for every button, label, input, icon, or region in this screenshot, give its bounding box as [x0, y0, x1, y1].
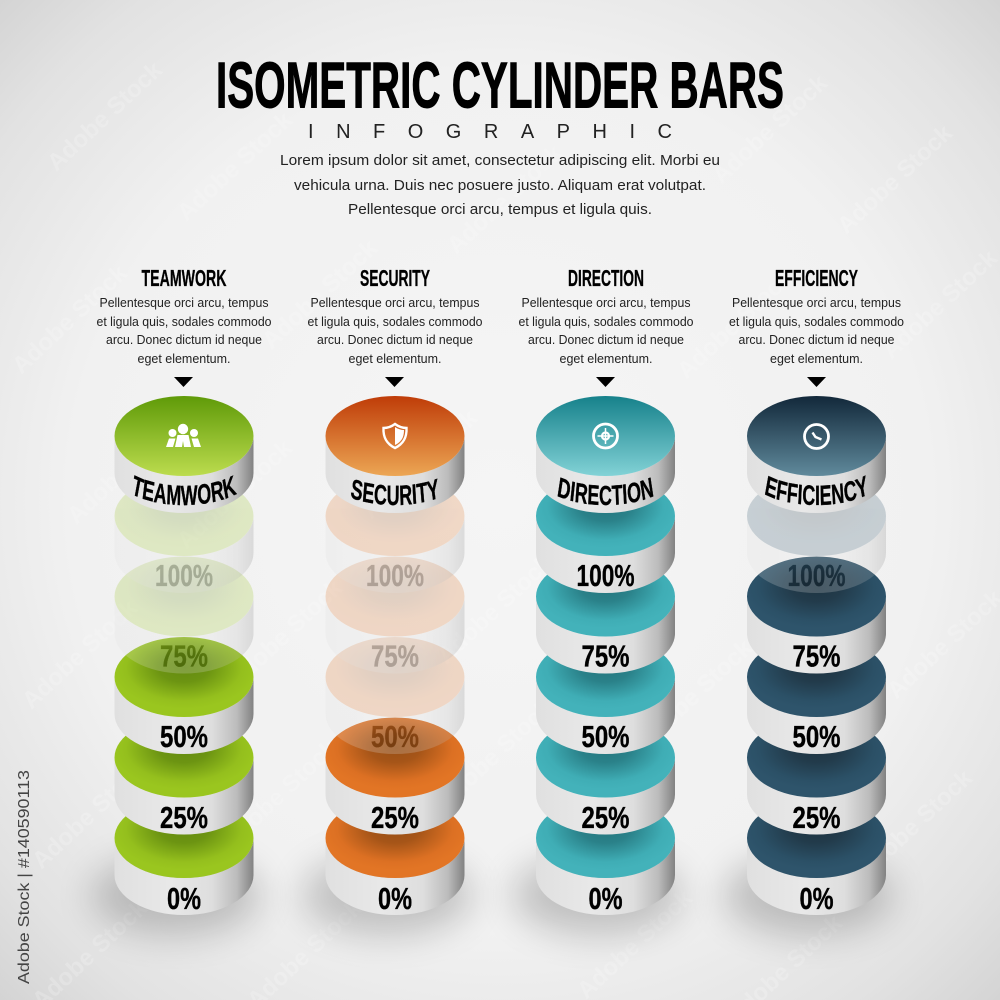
tier 50% (faded): 50% — [371, 719, 419, 754]
tier 75%: 75% — [792, 638, 840, 674]
tier 0% — [114, 798, 254, 916]
column heading: teamwork — [96, 265, 272, 366]
tier 75% (faded) — [326, 556, 464, 674]
tier 100% (faded) — [326, 476, 464, 593]
column heading: teamwork: arcu. Donec dictum id neque — [106, 333, 262, 347]
icon: team — [166, 424, 201, 447]
column heading: efficiency: et ligula quis, sodales commodo — [729, 315, 904, 329]
intro text: vehicula urna. Duis nec posuere justo. Aliquam erat volutpat. — [294, 177, 706, 194]
tier 100% — [536, 476, 675, 593]
tier 25%: 25% — [792, 800, 840, 835]
column heading: direction: Pellentesque orci arcu, tempus — [522, 296, 690, 310]
cylinder column: efficiency — [713, 396, 904, 951]
watermark pattern: Adobe Stock — [432, 549, 558, 669]
tier 100% (faded): 100% — [788, 558, 846, 593]
top cap: direction — [536, 396, 675, 513]
intro text — [280, 152, 720, 218]
tier 75% (faded): 75% — [160, 638, 208, 674]
curved label: efficiency: EFFICIENCY — [764, 475, 866, 506]
intro text: Lorem ipsum dolor sit amet, consectetur adipiscing elit. Morbi eu — [280, 152, 720, 169]
column heading: efficiency: eget elementum. — [770, 352, 863, 366]
column heading: security: Pellentesque orci arcu, tempus — [310, 296, 480, 310]
column heading: teamwork: Pellentesque orci arcu, tempus — [100, 296, 268, 310]
tier 0%: 0% — [378, 881, 412, 916]
tier 25%: 25% — [371, 800, 419, 835]
column heading: teamwork: eget elementum. — [138, 352, 230, 366]
arrow: teamwork — [174, 377, 193, 387]
column heading: direction: eget elementum. — [560, 352, 652, 366]
column heading: efficiency: Pellentesque orci arcu, tempus — [732, 296, 901, 310]
watermark pattern: Adobe Stock — [7, 259, 133, 379]
tier 50%: 50% — [160, 719, 208, 754]
column heading: direction: et ligula quis, sodales commodo — [518, 315, 694, 329]
curved label: teamwork: TEAMWORK — [134, 475, 238, 506]
tier 0% — [747, 798, 886, 916]
arrow: direction — [596, 377, 615, 387]
tier 100% (faded): 100% — [366, 558, 424, 593]
cylinder column: teamwork — [80, 396, 272, 951]
tier 75% — [536, 556, 675, 674]
watermark pattern: Adobe Stock — [832, 119, 958, 239]
icon: clock — [804, 424, 828, 448]
watermark pattern: Adobe Stock — [707, 69, 833, 189]
icon: compass — [594, 424, 618, 448]
icon: shield — [383, 424, 407, 448]
curved label: direction: DIRECTION — [558, 477, 654, 506]
watermark pattern: Adobe Stock — [27, 754, 153, 874]
column heading: teamwork: TEAMWORK — [142, 265, 227, 291]
tier 0%: 0% — [588, 881, 622, 916]
column heading: security — [308, 265, 483, 366]
tier 50%: 50% — [582, 719, 630, 754]
watermark pattern: Adobe Stock — [217, 734, 343, 854]
tier 50% (faded) — [326, 637, 464, 754]
tier 75%: 75% — [582, 638, 630, 674]
watermark pattern: Adobe Stock — [17, 594, 143, 714]
column heading: security: arcu. Donec dictum id neque — [317, 333, 473, 347]
watermark pattern: Adobe Stock — [222, 574, 348, 694]
intro text: Pellentesque orci arcu, tempus et ligula quis. — [348, 201, 652, 218]
watermark pattern: Adobe Stock — [877, 244, 1000, 364]
tier 100% (faded): 100% — [155, 558, 213, 593]
watermark pattern: Adobe Stock — [432, 694, 558, 814]
tier 0% — [536, 798, 675, 916]
column heading: direction — [518, 265, 694, 366]
tier 0%: 0% — [800, 881, 834, 916]
tier 50%: 50% — [792, 719, 840, 754]
tier 100% (faded) — [114, 476, 254, 593]
curved label: security: SECURITY — [350, 478, 438, 506]
tier 25% — [747, 718, 886, 835]
tier 25% — [114, 718, 254, 835]
stock credit: Adobe Stock | #140590113 — [16, 770, 33, 984]
column heading: direction: DIRECTION — [568, 265, 644, 291]
tier 0%: 0% — [167, 881, 201, 916]
watermark pattern: Adobe Stock — [632, 634, 758, 754]
tier 25% — [536, 718, 675, 835]
tier 25% — [326, 718, 464, 835]
watermark pattern: Adobe Stock — [172, 106, 298, 226]
watermark pattern: Adobe Stock — [62, 409, 188, 529]
cylinder column: direction — [502, 396, 693, 951]
watermark pattern: Adobe Stock — [357, 404, 483, 524]
top cap: teamwork — [114, 396, 254, 513]
subtitle: INFOGRAPHIC — [308, 121, 672, 143]
tier 75% (faded): 75% — [371, 638, 419, 674]
tier 75% — [747, 556, 886, 674]
column heading: efficiency: EFFICIENCY — [775, 265, 858, 291]
tier 50% — [536, 637, 675, 754]
watermark pattern: Adobe Stock — [257, 234, 383, 354]
tier 75% (faded) — [114, 556, 254, 674]
tier 25%: 25% — [582, 800, 630, 835]
watermark pattern: Adobe Stock — [442, 139, 568, 259]
column heading: efficiency: arcu. Donec dictum id neque — [738, 333, 895, 347]
arrow: efficiency — [807, 377, 826, 387]
tier 100%: 100% — [576, 558, 634, 593]
arrow: security — [385, 377, 404, 387]
column heading: direction: arcu. Donec dictum id neque — [528, 333, 684, 347]
top cap: security — [326, 396, 464, 513]
column heading: security: et ligula quis, sodales commodo — [308, 315, 483, 329]
watermark pattern: Adobe Stock — [852, 764, 978, 884]
tier 50% — [747, 637, 886, 754]
cylinder column: security — [292, 396, 482, 951]
column heading: security: SECURITY — [360, 265, 430, 291]
tier 50% — [114, 637, 254, 754]
column heading: efficiency — [729, 265, 904, 366]
column heading: security: eget elementum. — [348, 352, 442, 366]
tier 25%: 25% — [160, 800, 208, 835]
tier 0% — [326, 798, 464, 916]
watermark pattern: Adobe Stock — [672, 264, 798, 384]
watermark pattern: Adobe Stock — [172, 434, 298, 554]
top cap: efficiency — [747, 396, 886, 513]
tier 100% (faded) — [747, 476, 886, 593]
watermark pattern: Adobe Stock — [42, 56, 168, 176]
column heading: teamwork: et ligula quis, sodales commodo — [96, 315, 272, 329]
